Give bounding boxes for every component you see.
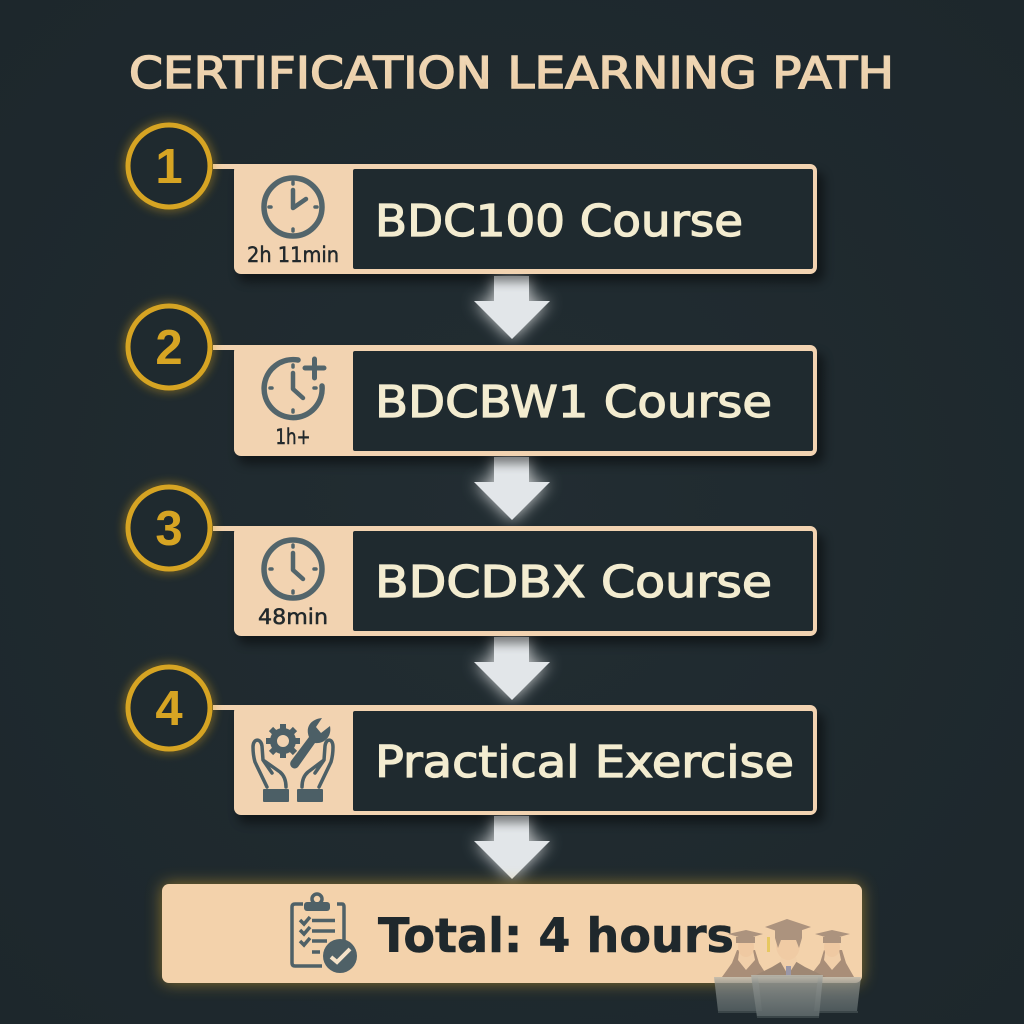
course name: BDCBW1 Course (375, 377, 772, 428)
icon: clipboard with check (292, 894, 357, 973)
step 4 number badge (128, 667, 210, 749)
step 1 number badge: 1 (155, 140, 183, 194)
arrow: step 2 to 3 (474, 457, 550, 520)
graduates illustration (714, 919, 861, 1018)
arrow: step 4 to total (474, 816, 550, 879)
step 1: BDC100 Course (128, 125, 824, 282)
step 3: BDCDBX Course (128, 487, 824, 644)
course name: BDC100 Course (375, 196, 743, 247)
duration label: 2h 11min (247, 243, 339, 267)
graduate centre (752, 919, 826, 977)
step 4: Practical Exercise (128, 667, 824, 823)
step 3 number badge (128, 487, 210, 569)
step 1 number badge (128, 125, 210, 207)
graduate right (809, 930, 854, 977)
duration label: 1h+ (276, 425, 310, 449)
arrow: step 1 to 2 (474, 276, 550, 339)
icon: clock with plus (264, 359, 324, 418)
course name: Practical Exercise (375, 737, 794, 788)
step 2: BDCBW1 Course (128, 306, 824, 464)
icon: hands with gear and wrench (253, 718, 333, 802)
icon: clock 2h 11min (264, 178, 322, 236)
duration label: 48min (258, 605, 328, 629)
left hand (253, 740, 286, 787)
translucent laptops (714, 975, 861, 1018)
wrench (290, 718, 330, 768)
step 3 number badge: 3 (155, 502, 183, 556)
total text: Total: 4 hours (378, 909, 734, 964)
step 4 number badge: 4 (155, 682, 183, 736)
step 2 number badge: 2 (155, 321, 183, 375)
icon: clock 48min (264, 540, 322, 598)
graduate left (722, 930, 768, 977)
title: CERTIFICATION LEARNING PATH (129, 48, 894, 99)
arrow: step 3 to 4 (474, 637, 550, 700)
course name: BDCDBX Course (375, 557, 772, 608)
right hand (302, 740, 333, 787)
total panel (162, 884, 862, 1018)
step 2 number badge (128, 306, 210, 388)
gear (266, 724, 300, 758)
